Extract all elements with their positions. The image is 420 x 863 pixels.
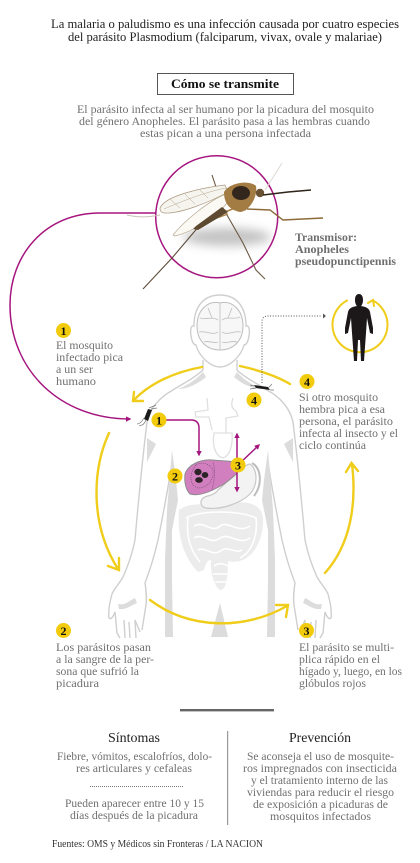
step 4: hembra pica a esa	[299, 403, 385, 416]
transmitter label	[295, 231, 396, 268]
panel: síntomas	[57, 730, 212, 822]
step 2: picadura	[56, 677, 99, 690]
step 4: ciclo continúa	[299, 439, 366, 452]
silhouette	[345, 294, 373, 361]
arrow: hand to hand	[150, 600, 288, 623]
title: del parásito Plasmodium (falciparum, vivax, ovale y malariae)	[68, 29, 382, 44]
intro text	[77, 103, 374, 140]
step 3: plica rápido en el	[299, 653, 380, 666]
panel: prevención	[243, 730, 397, 823]
sources: Fuentes: OMS y Médicos sin Fronteras / LA NACION	[52, 839, 263, 850]
purple arrows: liver to blood	[237, 434, 259, 491]
mosquito on arm	[137, 405, 157, 426]
mosquito illustration in circle	[127, 156, 323, 289]
column divider	[227, 731, 228, 825]
icon: infected person	[332, 294, 387, 361]
panel: síntomas: días después de la picadura	[70, 809, 198, 822]
arrow: arm to hand	[97, 433, 119, 570]
panel: prevención: de exposición a picaduras de	[253, 798, 388, 811]
panel: síntomas: Fiebre, vómitos, escalofríos, dolo-	[57, 750, 212, 763]
head and brain	[191, 295, 249, 367]
arrow: hand to shoulder	[325, 463, 358, 573]
step 3: 3	[304, 624, 310, 638]
panel: síntomas: res articulares y cefaleas	[76, 762, 192, 775]
crotch shade	[211, 603, 228, 637]
step 1: humano	[56, 375, 96, 388]
panel: prevención: Se aconseja el uso de mosquite-	[247, 750, 394, 763]
number badges on the body: 4	[251, 393, 257, 407]
number badges on the body	[152, 392, 262, 484]
step 4: Si otro mosquito	[299, 391, 378, 404]
liver	[185, 460, 241, 495]
panel: prevención: y el tratamiento interno de las	[251, 774, 388, 787]
step 1: El mosquito	[56, 339, 113, 352]
transmitter label: Transmisor:	[295, 231, 357, 244]
stomach	[201, 464, 256, 508]
purple path: bite to liver	[166, 420, 199, 455]
step 1: a un ser	[56, 363, 93, 376]
step 1: infectado pica	[56, 351, 123, 364]
section divider	[180, 709, 274, 711]
shadow	[183, 228, 271, 246]
number badges on the body: 2	[172, 469, 178, 483]
heading: Cómo se transmite: Cómo se transmite	[171, 77, 279, 91]
step 1	[56, 323, 123, 388]
yellow cycle arrows	[97, 366, 358, 623]
intro text: del género Anopheles. El parásito pasa a las hembras cuando	[79, 115, 370, 128]
transmitter label: pseudopunctipennis	[295, 255, 396, 268]
title	[51, 16, 399, 44]
parasite cells	[194, 469, 208, 483]
transmitter label: Anopheles	[295, 243, 350, 256]
step 3	[299, 623, 402, 690]
step 2: a la sangre de la per-	[56, 653, 154, 666]
dotted arrow head	[323, 314, 326, 318]
step 3: hígado y, luego, en los	[299, 665, 402, 678]
purple curve from mosquito to the arm	[10, 213, 156, 419]
step 4: infecta al insecto y el	[299, 427, 398, 440]
panel: síntomas: Pueden aparecer entre 10 y 15	[65, 797, 204, 810]
step 3: El parásito se multi-	[299, 641, 394, 654]
arrow: shoulder to arm	[133, 367, 202, 401]
heading: Cómo se transmite	[158, 74, 294, 94]
dotted path to infected person	[262, 316, 322, 383]
thoracic vessels	[195, 398, 238, 458]
panel: síntomas: Síntomas	[108, 730, 160, 745]
number badges on the body: 3	[235, 458, 241, 472]
step 2: Los parásitos pasan	[56, 641, 151, 654]
step 3: glóbulos rojos	[299, 677, 366, 690]
step 2: sona que sufrió la	[56, 665, 139, 678]
title: La malaria o paludismo es una infección causada por cuatro especies	[51, 16, 399, 31]
right side outline	[234, 360, 331, 638]
human body illustration	[109, 295, 331, 638]
arrow: shoulder segment	[240, 366, 290, 384]
mosquito	[127, 163, 323, 289]
left side outline	[109, 360, 206, 638]
magnifier circle	[156, 156, 278, 278]
mosquito on shoulder	[250, 384, 274, 390]
step 4: persona, el parásito	[299, 415, 393, 428]
step 4: 4	[304, 375, 310, 389]
panel: prevención: mosquitos infectados	[270, 810, 371, 823]
panel: prevención: Prevención	[289, 730, 351, 745]
panel: prevención: viviendas para reducir el riesgo	[247, 786, 394, 799]
step 4	[299, 374, 398, 452]
intro text: estas pican a una persona infectada	[140, 127, 311, 140]
yellow ring	[332, 300, 387, 352]
step 2: 2	[60, 624, 66, 638]
panel: prevención: ros impregnados con insecticida	[243, 762, 397, 775]
step 1: 1	[60, 324, 66, 338]
number badges on the body: 1	[156, 413, 162, 427]
intestines	[179, 502, 263, 590]
spleen	[252, 463, 260, 496]
step 2	[56, 623, 154, 690]
intro text: El parásito infecta al ser humano por la picadura del mosquito	[77, 103, 374, 116]
